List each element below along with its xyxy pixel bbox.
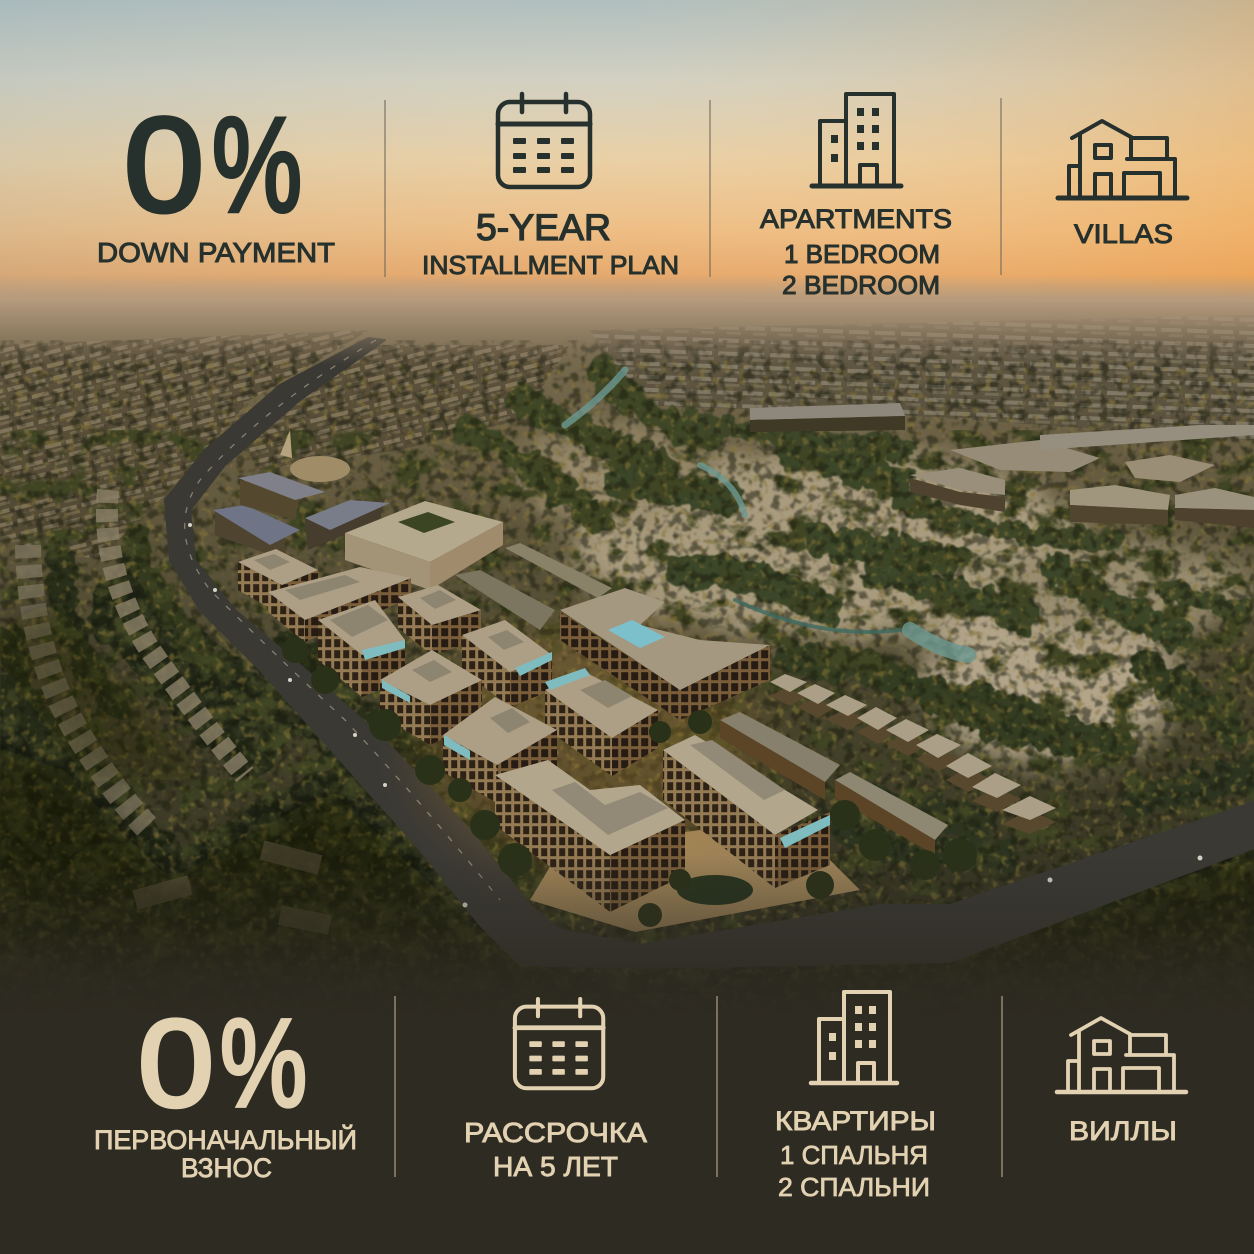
main road (165, 338, 1254, 968)
dividers top (385, 98, 1001, 277)
text: 2 spalni: 2 СПАЛЬНИ (778, 1172, 930, 1202)
trees around blocks (282, 637, 977, 927)
block 3 (318, 600, 405, 697)
block 5 (462, 620, 552, 707)
ground base (0, 302, 1254, 1022)
block 7 (545, 668, 658, 776)
icon: villa (1058, 121, 1187, 198)
forest shade (0, 600, 1254, 1020)
foliage clumps (0, 340, 1254, 1020)
heading: 0 percent: 0 (124, 91, 204, 240)
text: villy: ВИЛЛЫ (1069, 1116, 1177, 1146)
river (565, 370, 968, 655)
heading: 0 percent russian: 0 (138, 995, 214, 1133)
block 10 (663, 735, 830, 888)
icon: calendar (515, 999, 603, 1088)
apartment blocks (238, 549, 830, 912)
courtyard block (345, 501, 503, 590)
icon: villa (1057, 1018, 1186, 1092)
text: apartments: APARTMENTS (760, 204, 952, 234)
text: vznos: ВЗНОС (181, 1153, 272, 1183)
text: down payment: DOWN PAYMENT (97, 237, 335, 268)
villa rows at left (28, 490, 330, 925)
block 6 (380, 650, 482, 745)
dividers bottom (395, 996, 1002, 1177)
heading: 0 percent: % (212, 91, 302, 240)
plaza under apartments (530, 830, 860, 932)
text: installment plan: INSTALLMENT PLAN (422, 250, 679, 280)
ground with foliage (0, 370, 1254, 1025)
icon: apartment building (811, 992, 897, 1083)
horizon haze (0, 275, 1254, 365)
small villa roofs (770, 674, 1056, 820)
heading: 0 percent russian: % (220, 995, 307, 1133)
solar roofed buildings (213, 430, 390, 560)
playground (677, 875, 753, 905)
warm glow (420, 630, 760, 870)
pool building (560, 588, 770, 720)
block 9 (495, 760, 685, 912)
small villa bodies (770, 688, 1056, 834)
text: 1 spalnya: 1 СПАЛЬНЯ (780, 1140, 928, 1170)
block 8 (443, 697, 557, 803)
text: 2 bedroom: 2 BEDROOM (782, 270, 940, 300)
icon: apartment building (812, 94, 901, 186)
block 1 (238, 549, 318, 615)
heading: 0 percent (124, 91, 302, 240)
block 2 (268, 567, 411, 642)
block 4 (398, 585, 481, 655)
row of terraces (455, 543, 948, 855)
heading: 0 percent russian (138, 995, 307, 1133)
sky background (0, 0, 1254, 320)
text: villas: VILLAS (1074, 219, 1173, 249)
text: down payment russian: ПЕРВОНАЧАЛЬНЫЙ (94, 1124, 357, 1155)
panel: top offer band (97, 91, 1187, 300)
tree lines (0, 370, 1254, 916)
text: rassrochka: РАССРОЧКА (464, 1117, 647, 1148)
text: 5-year: 5-YEAR (476, 207, 611, 248)
icon: calendar (498, 94, 590, 187)
far neighbourhoods (0, 315, 1254, 560)
panel: bottom background (0, 1014, 1254, 1254)
panel: bottom offer band (94, 992, 1186, 1202)
far right low-rise (750, 403, 1254, 528)
aerial landscape (0, 275, 1254, 1025)
bottom fade (0, 855, 1254, 1015)
text: 1 bedroom: 1 BEDROOM (784, 239, 940, 269)
text: na 5 let: НА 5 ЛЕТ (493, 1151, 618, 1182)
text: kvartiry: КВАРТИРЫ (775, 1106, 936, 1136)
